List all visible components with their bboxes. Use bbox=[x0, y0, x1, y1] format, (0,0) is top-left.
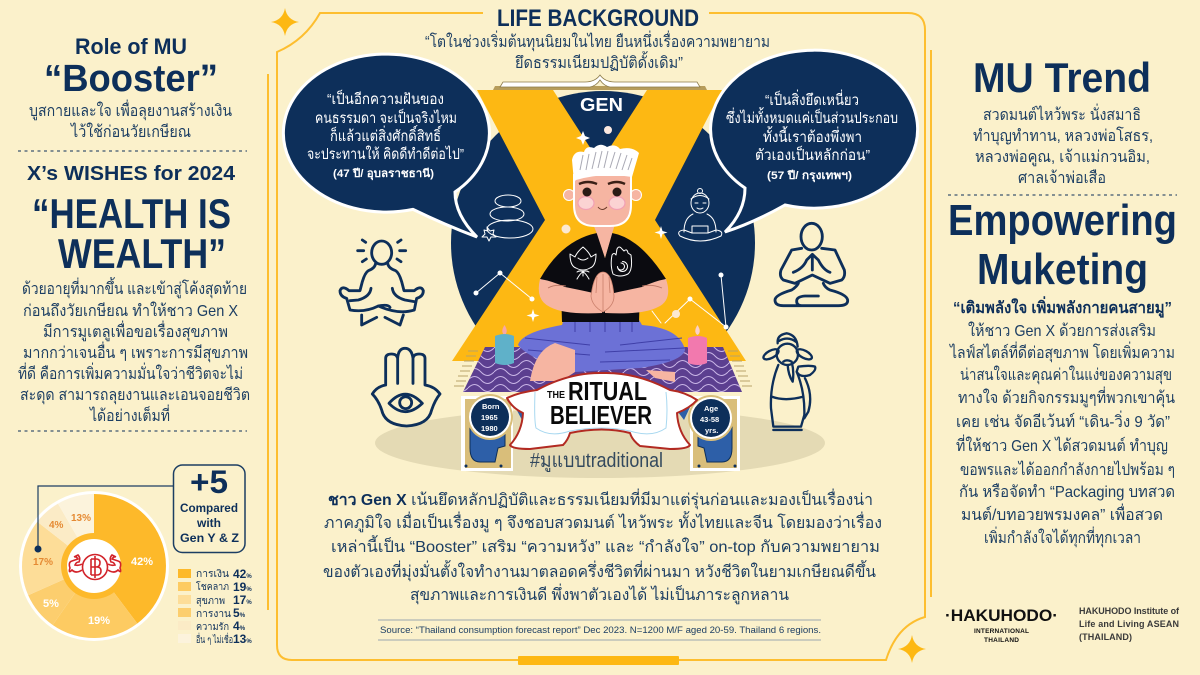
icon: open book bbox=[493, 75, 707, 90]
text: body paragraph bbox=[323, 488, 882, 605]
speech bubble: left quote: (47 ปี/ อุบลราชธานี) bbox=[333, 167, 434, 181]
logo: hakuhodo international thailand: INTERNATIONAL bbox=[974, 628, 1029, 635]
legend: donut categories: การเงิน bbox=[196, 569, 229, 580]
shape: yellow X bbox=[452, 90, 746, 361]
logo: hakuhodo international thailand bbox=[945, 606, 1058, 644]
ribbon: the ritual believer bbox=[507, 373, 697, 449]
plaque: born 1965-1980 bbox=[461, 394, 513, 471]
panel: life background bbox=[283, 5, 918, 640]
text: empowering explanation: กัน หรือจัดทำ “Packaging บทสวด bbox=[959, 483, 1175, 501]
heading: health is wealth: WEALTH” bbox=[58, 230, 226, 277]
logo text: hakuhodo institute bbox=[1079, 606, 1180, 642]
legend: donut categories: สุขภาพ bbox=[196, 596, 225, 607]
text: MU trend list bbox=[973, 103, 1153, 187]
heading: life background: LIFE BACKGROUND bbox=[497, 5, 699, 32]
text: empowering explanation bbox=[948, 321, 1175, 548]
speech bubble: right quote: ตัวเองเป็นหลักก่อน” bbox=[755, 145, 870, 164]
icon: sparkle top-left bbox=[271, 8, 299, 36]
text: background quote bbox=[425, 30, 770, 72]
text: health explanation: มากกว่าเจนอื่น ๆ เพราะการมีสุขภาพ bbox=[23, 341, 248, 363]
callout: +5 compared with Gen Y and Z bbox=[34, 464, 245, 552]
icon: praying figure right bbox=[775, 223, 848, 306]
callout: +5 compared with Gen Y and Z: Gen Y & Z bbox=[180, 533, 239, 545]
heading: health is wealth: “HEALTH IS bbox=[32, 190, 231, 237]
text: MU trend list: ศาลเจ้าพ่อเสือ bbox=[1018, 169, 1106, 187]
heading: health is wealth bbox=[32, 190, 231, 277]
logo text: hakuhodo institute: Life and Living ASEAN bbox=[1079, 619, 1179, 629]
chart: donut of wishes: 19% bbox=[88, 615, 110, 627]
legend: donut categories: 42% bbox=[233, 567, 252, 581]
logo: hakuhodo international thailand: THAILAND bbox=[984, 637, 1019, 644]
legend: donut categories: 13% bbox=[233, 632, 252, 646]
text: MU trend list: สวดมนต์ไหว้พระ นั่งสมาธิ bbox=[983, 103, 1141, 124]
chart: donut of wishes: 17% bbox=[33, 557, 53, 568]
icon: teal candle bbox=[495, 325, 514, 365]
text: body paragraph: ชาว Gen X เน้นยึดหลักปฏิบัติและธรรมเนียมที่มีมาแต่รุ่นก่อนและมองเป็นเรื่องน่า bbox=[328, 488, 873, 510]
legend: donut categories: การงาน bbox=[196, 609, 231, 620]
decoration bar bbox=[518, 656, 679, 665]
text: MU trend list: หลวงพ่อคูณ, เจ้าแม่กวนอิม, bbox=[975, 148, 1150, 167]
text: body paragraph: สุขภาพและการเงินดี พึ่งพาตัวเองได้ ไม่เป็นภาระลูกหลาน bbox=[410, 583, 789, 605]
speech bubble: right quote: “เป็นสิ่งยึดเหนี่ยว bbox=[765, 89, 859, 109]
heading: role of MU: Role of MU bbox=[75, 34, 187, 59]
logo text: hakuhodo institute: (THAILAND) bbox=[1079, 632, 1132, 642]
text: health explanation: ด้วยอายุที่มากขึ้น และเข้าสู่โค้งสุดท้าย bbox=[22, 277, 247, 299]
legend: donut categories: 5% bbox=[233, 606, 246, 620]
text: background quote: “โตในช่วงเริ่มต้นทุนนิยมในไทย ยืนหนึ่งเรื่องความพยายาม bbox=[425, 30, 770, 52]
chart: donut of wishes: 13% bbox=[71, 513, 91, 524]
panel: right column bbox=[945, 54, 1180, 644]
plaque: age 43-58 bbox=[688, 395, 740, 471]
chart: donut of wishes: 4% bbox=[49, 520, 64, 531]
text: empowering explanation: ให้ชาว Gen X ด้วยการส่งเสริม bbox=[968, 321, 1156, 340]
icon: chinese deity bbox=[762, 333, 815, 430]
source note: Source: “Thailand consumption forecast report” Dec 2023. N=1200 M/F aged 20-59. Thailand 6 regions. bbox=[380, 625, 821, 635]
heading: empowering muketing: Muketing bbox=[977, 245, 1148, 294]
legend: donut categories: โชคลาภ bbox=[196, 580, 229, 593]
plaque: age 43-58: Age bbox=[704, 404, 718, 413]
speech bubble: right quote: (57 ปี/ กรุงเทพฯ) bbox=[767, 169, 852, 183]
constellations bbox=[474, 126, 728, 330]
text: GEN: GEN bbox=[580, 95, 623, 115]
icon: hamsa hand with eye bbox=[372, 348, 440, 426]
text: empowering explanation: เคย เช่น จัดอีเว้นท์ “เดิน-วิ่ง 9 วัด” bbox=[956, 410, 1170, 431]
chart: donut of wishes: 42% bbox=[131, 556, 153, 568]
ribbon: the ritual believer: RITUAL bbox=[568, 376, 647, 406]
text: health explanation: ก่อนถึงวัยเกษียณ ทำให้ชาว Gen X bbox=[23, 301, 238, 320]
legend: donut categories: ความรัก bbox=[196, 622, 229, 633]
text: empowering explanation: เพิ่มกำลังใจได้ทุกที่ทุกเวลา bbox=[984, 526, 1141, 548]
heading: booster: “Booster” bbox=[44, 58, 218, 100]
text: body paragraph: ของตัวเองที่มุ่งมั่นตั้งใจทำงานมาตลอดครึ่งชีวิตที่ผ่านมา หวังชีวิตในยามเกษียณดีขึ้น bbox=[323, 560, 876, 582]
text: health explanation: มีการมูเตลูเพื่อขอเรื่องสุขภาพ bbox=[43, 320, 228, 342]
figure: meditating man bbox=[518, 145, 685, 382]
chart: donut of wishes: 5% bbox=[43, 598, 59, 610]
callout: +5 compared with Gen Y and Z: +5 bbox=[190, 464, 228, 500]
panel: left column bbox=[18, 34, 252, 646]
speech bubble: left quote bbox=[283, 54, 489, 237]
figure: carpet bbox=[454, 347, 752, 392]
plaque: born 1965-1980: 1965 bbox=[481, 413, 498, 422]
text: booster description: บูสกายและใจ เพื่อลุยงานสร้างเงิน bbox=[29, 99, 232, 121]
text: booster description bbox=[29, 99, 232, 141]
icon: sparkle bottom-right bbox=[898, 635, 926, 663]
plaque: age 43-58: 43-58 bbox=[700, 415, 719, 424]
plaque: born 1965-1980: Born bbox=[482, 402, 500, 411]
legend: donut categories: 19% bbox=[233, 580, 252, 594]
legend: donut categories: อื่น ๆ ไม่เชื่อ bbox=[196, 632, 233, 646]
text: body paragraph: เหล่านี้เป็น “Booster” เสริม “ความหวัง” และ “กำลังใจ” on-top กับความพยายาม bbox=[331, 535, 880, 556]
text: empowering explanation: ไลฟ์สไตล์ที่ดีต่อสุขภาพ โดยเพิ่มความ bbox=[948, 341, 1175, 363]
chart: donut of wishes bbox=[19, 491, 169, 641]
illustration: gen X ritual believer bbox=[375, 75, 825, 478]
speech bubble: left quote: “เป็นอีกความฝันของ bbox=[327, 89, 444, 108]
ribbon: the ritual believer: BELIEVER bbox=[550, 400, 652, 430]
icon: lotus on shirt bbox=[570, 247, 596, 279]
text: background quote: ยึดธรรมเนียมปฏิบัติดั้งเดิม” bbox=[515, 51, 683, 72]
heading: MU trend: MU Trend bbox=[973, 54, 1151, 101]
text: booster description: ไว้ใช้ก่อนวัยเกษียณ bbox=[69, 122, 191, 141]
icon: pink candle bbox=[688, 325, 707, 365]
text: health explanation bbox=[18, 277, 250, 425]
text: empowering explanation: ทางใจ ด้วยกิจกรรมมูๆที่พวกเขาคุ้น bbox=[958, 386, 1175, 408]
ribbon: the ritual believer: THE bbox=[547, 390, 565, 401]
text: empowering explanation: ที่ให้ชาว Gen X ได้สวดมนต์ ทำบุญ bbox=[956, 434, 1168, 456]
legend: donut categories: 4% bbox=[233, 619, 246, 633]
plaque: born 1965-1980: 1980 bbox=[481, 424, 498, 433]
text: body paragraph: ภาคภูมิใจ เมื่อเป็นเรื่องมู ๆ จึงชอบสวดมนต์ ไหว้พระ ทั้งไทยและจีน โดยมองว่าเรื่อง bbox=[324, 511, 882, 533]
icon: meditating figure left bbox=[340, 240, 423, 325]
speech bubble: right quote bbox=[711, 50, 918, 232]
hashtag: #มูแบบtraditional bbox=[530, 450, 663, 473]
text: health explanation: ที่ดี คือการเพิ่มความมั่นใจว่าชีวิตจะไม่ bbox=[18, 362, 243, 383]
logo: hakuhodo international thailand: ·HAKUHODO· bbox=[945, 606, 1058, 625]
legend: donut categories bbox=[178, 567, 252, 646]
speech bubble: left quote: คนธรรมดา จะเป็นจริงไหม bbox=[315, 108, 457, 127]
heading: empowering muketing bbox=[948, 196, 1177, 294]
icon: buddha bbox=[679, 188, 722, 241]
text: MU trend list: ทำบุญทำทาน, หลวงพ่อโสธร, bbox=[973, 126, 1153, 146]
text: health explanation: สะดุด สามารถลุยงานและเอนจอยชีวิต bbox=[20, 386, 250, 405]
speech bubble: left quote: ก็แล้วแต่สิ่งศักดิ์สิทธิ์ bbox=[330, 125, 443, 145]
plaque: age 43-58: yrs. bbox=[705, 426, 718, 435]
icon: stacked stones bbox=[482, 195, 533, 241]
text: empowering quote: “เติมพลังใจ เพิ่มพลังกายคนสายมู” bbox=[953, 296, 1172, 319]
logo text: hakuhodo institute: HAKUHODO Institute of bbox=[1079, 606, 1180, 616]
icon: baht with muscle arms bbox=[69, 554, 121, 580]
callout: +5 compared with Gen Y and Z: Compared bbox=[180, 503, 238, 515]
speech bubble: right quote: ซึ่งไม่ทั้งหมดแค่เป็นส่วนประกอบ bbox=[726, 107, 898, 127]
legend: donut categories: 17% bbox=[233, 593, 252, 607]
icon: hand on shirt bbox=[611, 247, 632, 276]
speech bubble: left quote: จะประทานให้ คิดดีทำดีต่อไป” bbox=[307, 145, 464, 163]
text: health explanation: ได้อย่างเต็มที่ bbox=[88, 404, 170, 425]
heading: wishes for 2024: X’s WISHES for 2024 bbox=[27, 163, 236, 185]
text: empowering explanation: มนต์/บทอวยพรมงคล” เพื่อสวด bbox=[961, 503, 1163, 524]
callout: +5 compared with Gen Y and Z: with bbox=[196, 518, 221, 530]
speech bubble: right quote: ทั้งนี้เราต้องพึ่งพา bbox=[763, 126, 862, 146]
